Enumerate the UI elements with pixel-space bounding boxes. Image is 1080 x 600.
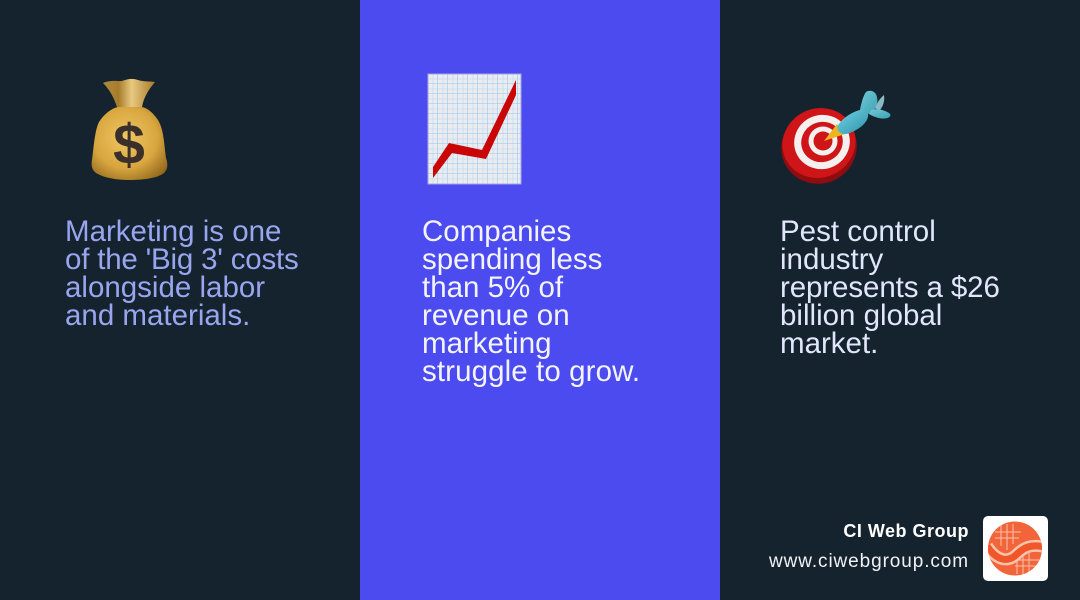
text: marketing big 3: of the 'Big 3' costs (65, 243, 299, 276)
text: pest control market: Pest control (780, 215, 936, 248)
text: marketing big 3: Marketing is one (65, 215, 281, 248)
text: pest control market: billion global (780, 299, 942, 332)
text: spending under 5%: struggle to grow. (422, 355, 640, 388)
text: spending under 5%: revenue on (422, 299, 570, 332)
icon: money bag: $ (113, 113, 145, 177)
text: spending under 5%: spending less (422, 243, 602, 276)
text: spending under 5%: Companies (422, 215, 571, 248)
text: pest control market: industry (780, 243, 883, 276)
text: spending under 5%: marketing (422, 327, 552, 360)
logo (983, 516, 1048, 581)
text: spending under 5% (422, 215, 640, 388)
brand name: CI Web Group (843, 521, 969, 541)
brand url: www.ciwebgroup.com (769, 551, 969, 572)
text: pest control market (780, 215, 1000, 360)
text: pest control market: market. (780, 327, 878, 360)
panel: left background (0, 0, 360, 600)
text: marketing big 3 (65, 215, 299, 332)
text: marketing big 3: alongside labor (65, 271, 265, 304)
icon: money bag (92, 78, 168, 180)
text: spending under 5%: than 5% of (422, 271, 563, 304)
icon: rising chart (428, 74, 522, 184)
text: marketing big 3: and materials. (65, 299, 250, 332)
panel: middle background (360, 0, 720, 600)
icon: dart and target (781, 90, 890, 184)
panel: right background (720, 0, 1080, 600)
text: pest control market: represents a $26 (780, 271, 1000, 304)
